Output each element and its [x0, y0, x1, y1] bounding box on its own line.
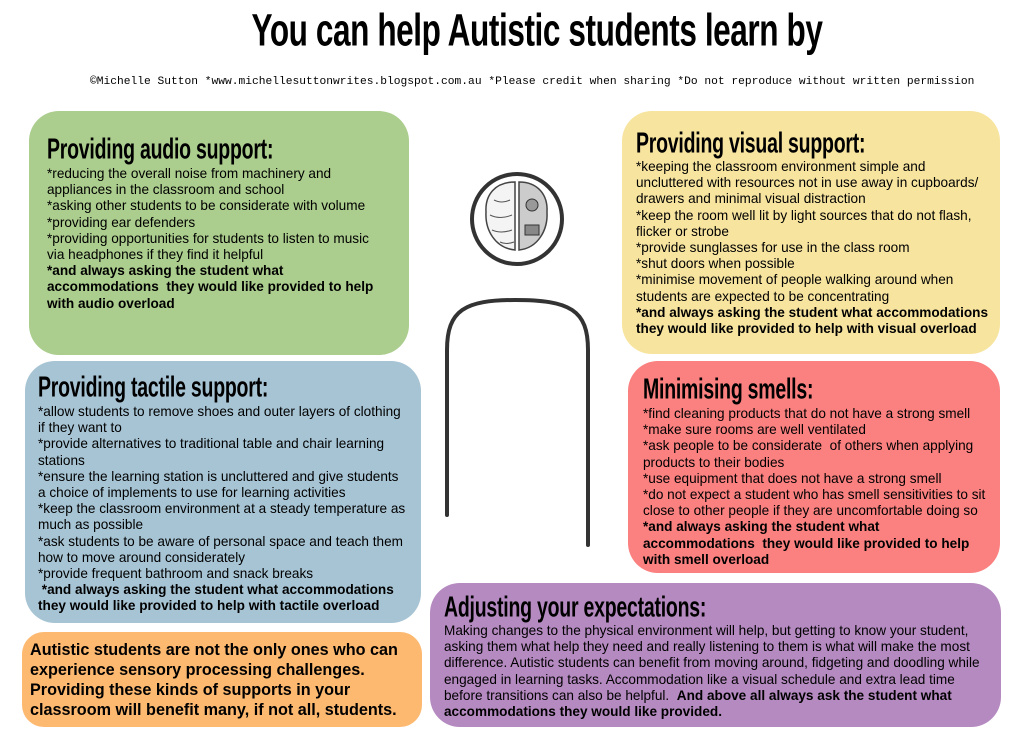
icon: person with brain: [445, 172, 590, 547]
heading: smells: Minimising smells:: [643, 373, 813, 405]
icon: body outline: [447, 300, 588, 545]
text: smells: *ask people to be considerate of others when applying products to their bodies: [643, 438, 973, 470]
panel: smells: [628, 361, 1000, 573]
text: tactile: *provide frequent bathroom and snack breaks: [38, 566, 313, 581]
text: smells: *use equipment that does not have a strong smell: [643, 471, 942, 486]
text: visual: *shut doors when possible: [636, 256, 795, 271]
panel: audio support: [29, 111, 409, 355]
text: tactile: [38, 404, 405, 613]
text: smells: [643, 406, 986, 567]
text: audio: *providing opportunities for students to listen to music via headphones if they find it helpful: [47, 231, 369, 262]
text: visual: [636, 159, 988, 336]
text: visual: *keeping the classroom environment simple and uncluttered with resources not in use away in cupboards/ drawers and minimal visual distraction: [636, 159, 978, 206]
text: audio: *and always asking the student what accommodations they would like provided to help with audio overload: [47, 263, 373, 311]
text: visual: *minimise movement of people walking around when students are expected to be concentrating: [636, 272, 953, 304]
credit line: ©Michelle Sutton *www.michellesuttonwrites.blogspot.com.au *Please credit when sharing *Do not reproduce without written permission: [90, 76, 974, 88]
text: tactile: *keep the classroom environment at a steady temperature as much as possible: [38, 501, 405, 532]
text: tactile: *ensure the learning station is uncluttered and give students a choice of implements to use for learning activities: [38, 469, 398, 500]
text: smells: *make sure rooms are well ventilated: [643, 422, 866, 437]
text: tactile: *provide alternatives to traditional table and chair learning stations: [38, 436, 384, 468]
text: tactile: *allow students to remove shoes and outer layers of clothing if they want to: [38, 404, 401, 435]
panel: expectations: [430, 583, 1001, 727]
heading: audio: Providing audio support:: [47, 133, 273, 165]
panel: visual support: [622, 111, 1000, 354]
heading: visual: Providing visual support:: [636, 127, 865, 159]
title: You can help Autistic students learn by: [252, 6, 822, 56]
text: visual: *keep the room well lit by light sources that do not flash, flicker or strobe: [636, 208, 972, 239]
text: audio: *asking other students to be considerate with volume: [47, 198, 365, 213]
text: visual: *provide sunglasses for use in the class room: [636, 240, 910, 255]
callout: note: Autistic students are not the only ones who can experience sensory processing challenges. Providing these kinds of supports in your classroom will benefit many, if not all, students.: [30, 641, 398, 719]
text: tactile: *and always asking the student what accommodations they would like provided to help with tactile overload: [38, 582, 394, 613]
heading: expectations: Adjusting your expectations:: [444, 591, 706, 623]
text: audio: *reducing the overall noise from machinery and appliances in the classroom and school: [47, 166, 331, 197]
text: expectations: Making changes to the physical environment will help, but getting to know your student, asking them what help they need and really listening to them is what will make the most difference. Autistic students can benefit from moving around, fidgeting and doodling while engaged in learning tasks. Accommodation like a visual schedule and extra lead time before transitions can also be helpful. And above all always ask the student what accommodations they would like provided.: [444, 623, 980, 719]
text: tactile: *ask students to be aware of personal space and teach them how to move around considerately: [38, 534, 403, 565]
text: smells: *and always asking the student what accommodations they would like provided to help with smell overload: [643, 519, 969, 567]
text: visual: *and always asking the student what accommodations they would like provided to help with visual overload: [636, 305, 988, 336]
panel: tactile support: [25, 361, 421, 623]
icon: head circle with brain: [472, 174, 562, 264]
text: audio: [47, 166, 373, 311]
heading: tactile: Providing tactile support:: [38, 371, 268, 403]
text: smells: *do not expect a student who has smell sensitivities to sit close to other people if they are uncomfortable doing so: [643, 487, 985, 518]
text: audio: *providing ear defenders: [47, 215, 195, 230]
text: smells: *find cleaning products that do not have a strong smell: [643, 406, 970, 421]
